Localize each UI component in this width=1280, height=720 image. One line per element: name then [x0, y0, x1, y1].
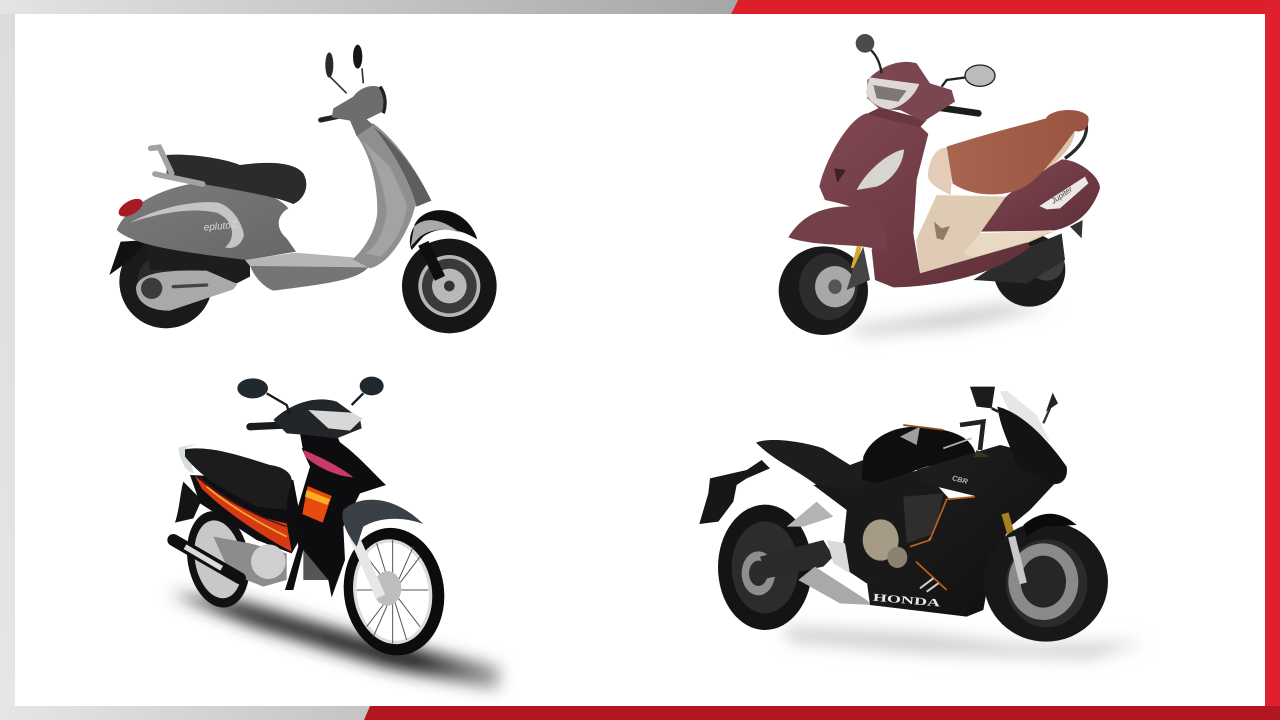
lower and main fairing [867, 445, 1067, 617]
neck [867, 107, 927, 127]
subframe silver [787, 502, 833, 527]
dark engine area [973, 233, 1065, 283]
front lamp [857, 149, 904, 190]
mirrors [237, 377, 384, 415]
upper pink decal [303, 450, 353, 477]
model decal [1039, 177, 1088, 209]
frame and engine backing [813, 470, 953, 583]
side body [190, 475, 303, 553]
front wheel [984, 522, 1108, 642]
frame: bottom red strip [364, 706, 1280, 720]
tail light [116, 195, 146, 220]
ground shadow [170, 593, 500, 690]
seat front beige [928, 147, 954, 195]
leg shield inner panel [362, 140, 407, 257]
vehicle: grey electric scooter [109, 45, 497, 333]
grab rail [1065, 120, 1086, 158]
CVT badge [141, 278, 162, 299]
tail tidy / license bracket [699, 460, 770, 524]
CVT cover [136, 270, 237, 311]
seat [167, 155, 306, 204]
rear fender [175, 482, 202, 523]
rear mudguard [109, 240, 148, 275]
seat [947, 110, 1089, 194]
floor panels [916, 195, 1053, 275]
ground shadow [847, 305, 1053, 335]
orange fairing accents [910, 497, 975, 590]
rear body [978, 159, 1100, 232]
headlamp [308, 410, 363, 431]
front fender [410, 210, 477, 250]
leg shield front dark edge [373, 127, 431, 207]
model decal: Jupiter [1048, 184, 1074, 206]
front fork [423, 243, 440, 278]
seat and tail [756, 440, 873, 490]
frame: left gray strip [0, 0, 15, 720]
fork [1005, 513, 1012, 537]
nose cowl [997, 407, 1067, 484]
Honda wing on tank [900, 427, 920, 445]
exhaust [173, 540, 240, 578]
left mirror [942, 65, 995, 87]
rear wheel [993, 233, 1065, 307]
leg shield [353, 123, 431, 268]
front wheel [402, 239, 497, 333]
exhaust fins [920, 578, 938, 592]
rear wheel [718, 505, 812, 630]
headlamp [866, 77, 919, 109]
frame: bottom gray strip [0, 706, 370, 720]
front fender [788, 206, 887, 252]
fork lower [1012, 537, 1023, 583]
windscreen [1000, 391, 1050, 442]
ground shadow [783, 627, 1147, 658]
swingarm [760, 540, 833, 578]
CVT slot [173, 285, 207, 287]
engine [213, 537, 330, 587]
silver side stripe [130, 202, 244, 248]
front fender [1023, 514, 1077, 537]
V emblem [834, 168, 846, 183]
floor emblem [934, 222, 950, 240]
front wheel [336, 521, 452, 662]
rear grab and tail [178, 443, 198, 473]
rear wheel [180, 506, 257, 613]
frame: top gray strip [0, 0, 738, 14]
mirrors [970, 387, 1058, 423]
head cowl [867, 62, 955, 122]
handlebar [250, 425, 287, 427]
orange tank accent [903, 425, 943, 430]
yellow-orange panel [302, 486, 332, 523]
vehicle: black Honda sport bike [699, 387, 1147, 658]
pillion trim [963, 230, 1053, 257]
rear tail dark [1070, 220, 1083, 238]
fuel tank [862, 427, 977, 483]
vehicle: maroon scooter [779, 34, 1100, 335]
front fender [342, 500, 423, 547]
engine [827, 493, 943, 573]
neck [300, 433, 343, 452]
beige side under seat [1033, 132, 1075, 177]
floorboard [245, 253, 370, 267]
front frame [285, 440, 386, 597]
seat [185, 448, 292, 510]
dark under-body shock area [147, 243, 250, 283]
fork lower dark [847, 247, 870, 290]
frame: top red strip [731, 0, 1280, 14]
front wheel [779, 246, 868, 335]
rear body panel [117, 184, 296, 260]
main leg shield body [819, 113, 1031, 287]
rear wheel [119, 235, 213, 328]
clip-on and lever [960, 422, 983, 450]
exhaust [798, 567, 872, 605]
badge text: eplutoZ [203, 220, 238, 234]
headset and mirrors [321, 45, 386, 136]
frame: right red strip [1265, 0, 1280, 720]
CBR lettering: CBR [951, 473, 969, 486]
head cowl [273, 399, 362, 438]
vehicle: black underbone moped [170, 377, 500, 690]
HONDA lettering: HONDA [872, 593, 941, 610]
flame decal [195, 476, 292, 552]
front fork [354, 537, 381, 597]
right mirror [856, 34, 882, 73]
fork [853, 247, 859, 268]
underbody [249, 263, 368, 291]
handlebar [937, 107, 978, 113]
rear rack [151, 147, 203, 184]
